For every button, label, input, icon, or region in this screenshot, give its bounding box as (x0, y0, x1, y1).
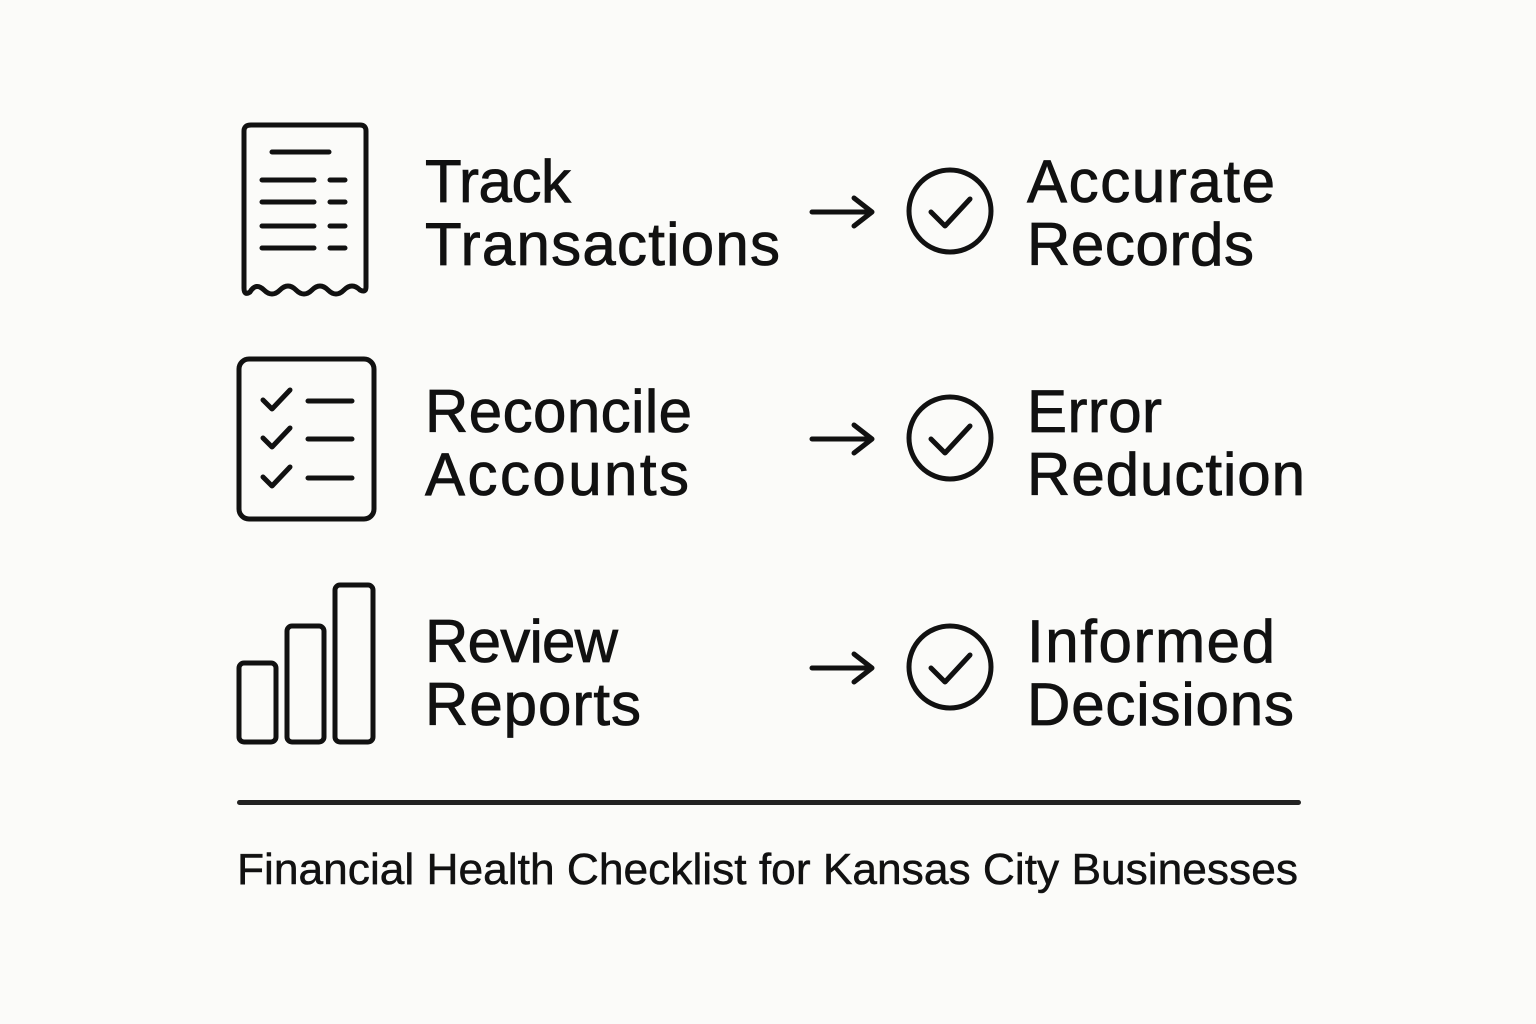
icon: check circle (909, 170, 991, 252)
result: Accurate Records: Accurate (1027, 148, 1275, 215)
row 2: reconcile accounts (239, 359, 1305, 519)
row 1: track transactions (244, 125, 1275, 294)
row 3: review reports: Decisions (1027, 671, 1294, 738)
label: Reconcile Accounts: Reconcile (425, 378, 692, 445)
arrow (812, 198, 872, 226)
label: Review Reports: Review (425, 608, 619, 675)
result: Informed Decisions: Informed (1027, 608, 1275, 675)
footer caption: Financial Health Checklist for Kansas City Businesses (237, 845, 1298, 894)
arrow (812, 654, 872, 682)
icon: receipt (244, 125, 366, 294)
arrow (812, 425, 872, 453)
row 2: reconcile accounts: Reduction (1027, 441, 1305, 508)
row 2: reconcile accounts: Accounts (425, 441, 689, 508)
row 1: track transactions: Records (1027, 211, 1254, 278)
label: Track Transactions: Track (425, 148, 572, 215)
icon: check circle (909, 626, 991, 708)
icon: check circle (909, 397, 991, 479)
result: Error Reduction: Error (1027, 378, 1162, 445)
row 3: review reports: Reports (425, 671, 641, 738)
row 3: review reports (239, 585, 1294, 742)
row 1: track transactions: Transactions (425, 211, 780, 278)
icon: checklist (239, 359, 374, 519)
icon: bar chart (239, 585, 373, 742)
